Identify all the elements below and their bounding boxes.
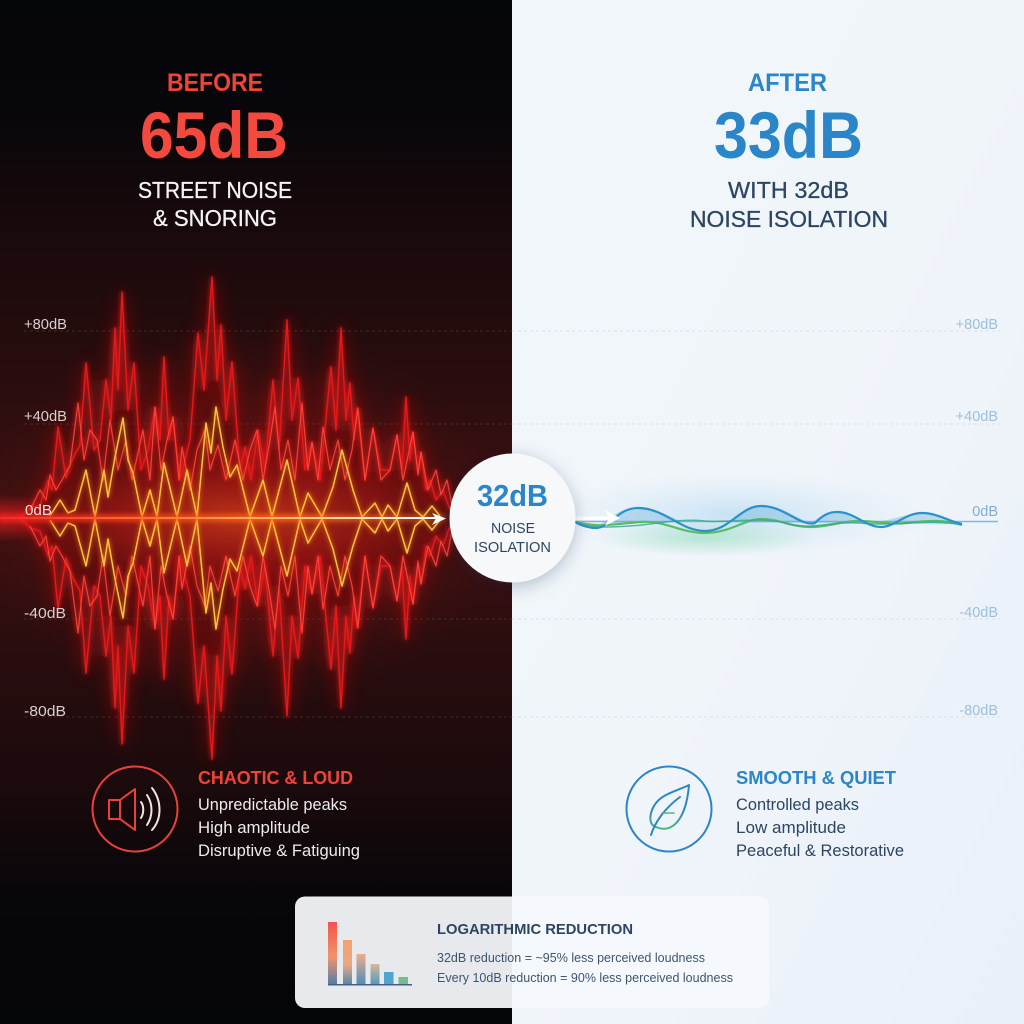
- text block: smooth and quiet: [736, 768, 904, 860]
- axis labels: before: +80dB: [24, 317, 67, 333]
- axis labels: after: [956, 317, 998, 719]
- axis labels: after: -40dB: [959, 605, 998, 621]
- axis labels: before: [24, 317, 67, 720]
- chart: chaotic red waveform: [0, 277, 512, 759]
- axis labels: before: -80dB: [24, 704, 66, 720]
- text block: chaotic and loud: [198, 768, 360, 860]
- arrow: into circle: [432, 513, 446, 525]
- subtitle: noise isolation: NOISE ISOLATION: [690, 206, 888, 232]
- axis labels: after: +40dB: [956, 409, 998, 425]
- chart: decreasing bars: [328, 922, 412, 986]
- list: smooth traits: Low amplitude: [736, 818, 846, 837]
- panel: logarithmic reduction: [295, 896, 769, 1008]
- label: before: BEFORE: [167, 69, 263, 97]
- heading: before: [138, 69, 292, 231]
- panel heading: LOGARITHMIC REDUCTION: [437, 921, 633, 938]
- panel: before background: [0, 0, 512, 1024]
- panel: after background: [512, 0, 1024, 1024]
- subtitle: street noise: STREET NOISE: [138, 177, 292, 203]
- chart: smooth blue and green waveform: [512, 331, 1000, 717]
- list: chaotic traits: [198, 795, 360, 860]
- label: after: AFTER: [748, 69, 827, 97]
- icon: leaf: [626, 766, 712, 852]
- panel line one: 32dB reduction = ~95% less perceived loudness: [437, 951, 705, 965]
- list: chaotic traits: Disruptive & Fatiguing: [198, 841, 360, 860]
- heading: smooth: SMOOTH & QUIET: [736, 768, 896, 788]
- value: 65dB: 65dB: [140, 98, 288, 172]
- callout: 32dB noise isolation badge: [450, 454, 576, 582]
- badge label: isolation: ISOLATION: [474, 540, 551, 556]
- badge label: noise: NOISE: [491, 521, 535, 537]
- list: smooth traits: [736, 795, 904, 860]
- list: chaotic traits: High amplitude: [198, 818, 310, 837]
- heading: chaotic: CHAOTIC & LOUD: [198, 768, 353, 788]
- subtitle: with 32dB: WITH 32dB: [728, 177, 849, 203]
- icon: speaker: [92, 766, 178, 852]
- subtitle: snoring: & SNORING: [153, 205, 277, 231]
- axis labels: before: -40dB: [24, 606, 66, 622]
- axis labels: after: -80dB: [959, 703, 998, 719]
- axis labels: after: +80dB: [956, 317, 998, 333]
- axis labels: before: +40dB: [24, 409, 67, 425]
- list: smooth traits: Controlled peaks: [736, 795, 859, 814]
- list: smooth traits: Peaceful & Restorative: [736, 841, 904, 860]
- panel line two: Every 10dB reduction = 90% less perceived loudness: [437, 971, 733, 985]
- heading: after: [690, 69, 888, 232]
- badge value: 32dB: [477, 478, 548, 513]
- axis labels: before: 0dB: [25, 503, 52, 519]
- list: chaotic traits: Unpredictable peaks: [198, 795, 347, 814]
- axis labels: after: 0dB: [972, 504, 998, 520]
- value: 33dB: 33dB: [714, 98, 863, 172]
